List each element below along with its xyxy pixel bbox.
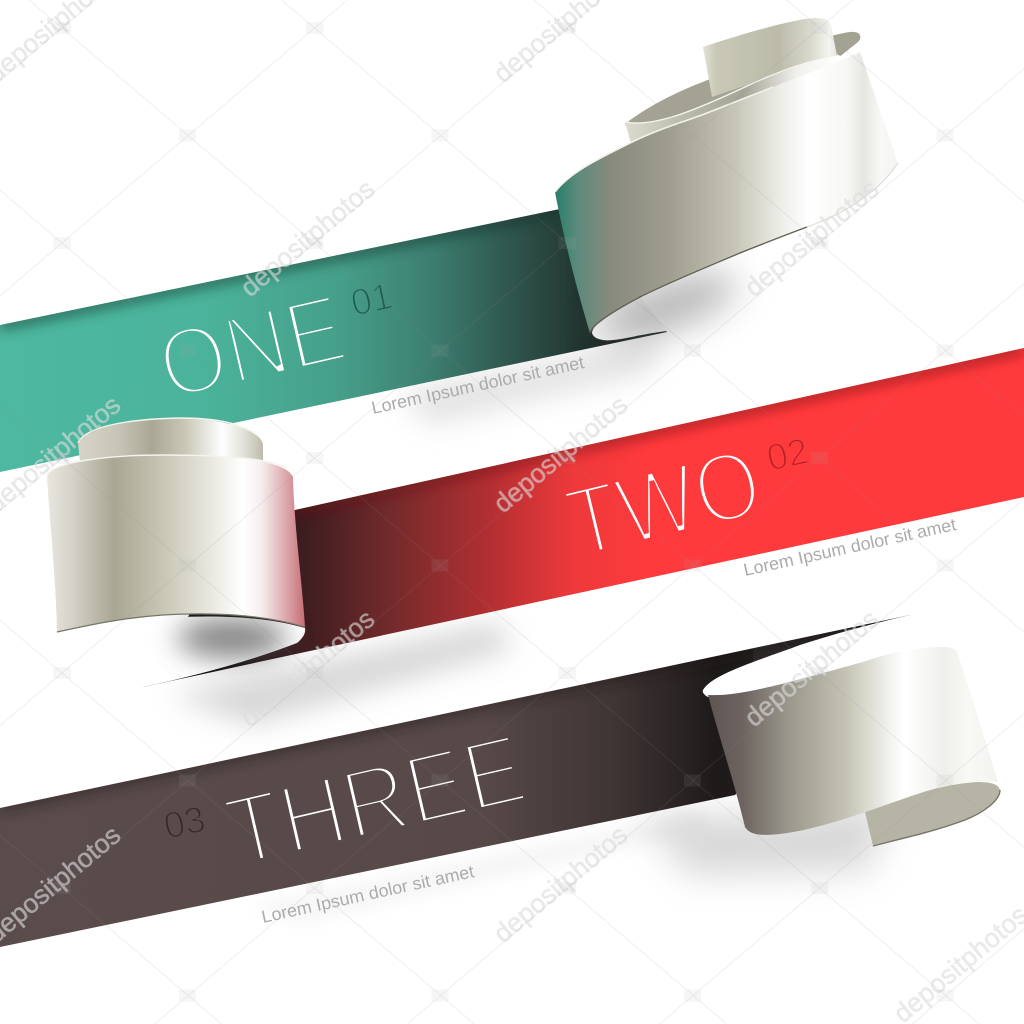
heading: TWO: TWO xyxy=(556,426,772,578)
ribbon two: red band xyxy=(143,348,1024,687)
watermark: depositphotos stamps: depositphotos xyxy=(739,174,884,303)
curl one: rolled paper at the end of the teal ribbon xyxy=(555,18,898,353)
caption: ribbon two: Lorem Ipsum dolor sit amet xyxy=(742,514,958,580)
heading: THREE: THREE xyxy=(216,712,535,887)
watermark: depositphotos stamps: depositphotos xyxy=(488,820,633,949)
caption: ribbon one: Lorem Ipsum dolor sit amet xyxy=(370,352,586,418)
curl three: rolled paper at the end of the brown ribbon xyxy=(703,615,1000,846)
number: 02: 02 xyxy=(763,430,812,479)
watermark: depositphotos stamps: depositphotos xyxy=(739,604,884,733)
curl two: rolled paper at the start of the red ribbon xyxy=(47,418,305,687)
ribbon one: teal band xyxy=(0,209,667,472)
ribbon three: brown band xyxy=(0,615,910,947)
watermark: depositphotos stamps: depositphotos xyxy=(488,390,633,519)
caption: ribbon three: Lorem Ipsum dolor sit amet xyxy=(260,861,476,927)
watermark: depositphotos stamps: depositphotos xyxy=(235,174,380,303)
paper shadows below the ribbons xyxy=(170,336,890,925)
watermark: depositphotos stamps: depositphotos xyxy=(235,604,380,733)
number: 03: 03 xyxy=(160,798,209,847)
heading: ONE: ONE xyxy=(149,274,355,420)
number: 01: 01 xyxy=(347,275,396,324)
